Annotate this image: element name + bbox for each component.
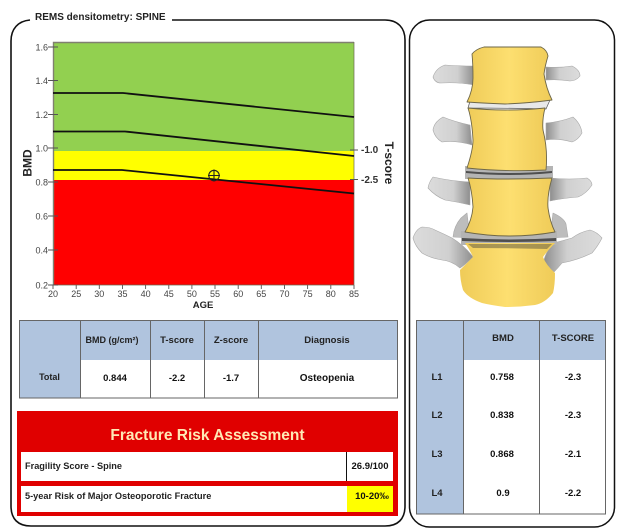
table: vertebra results: 0.868 bbox=[490, 449, 514, 460]
y axis labels: 1.2 bbox=[35, 110, 48, 120]
table: vertebra results: T-SCORE bbox=[552, 333, 594, 344]
panel: vertebrae and table bbox=[410, 20, 614, 527]
table: vertebra results: L3 bbox=[431, 449, 443, 460]
x axis labels: 45 bbox=[164, 289, 174, 299]
table: total results: Total bbox=[39, 372, 60, 382]
y axis labels: 0.2 bbox=[35, 280, 48, 290]
x axis labels: 40 bbox=[141, 289, 151, 299]
x axis labels: 25 bbox=[71, 289, 81, 299]
row: fragility score: 26.9/100 bbox=[352, 461, 388, 472]
transverse processes bbox=[413, 65, 602, 273]
x axis labels: 35 bbox=[117, 289, 128, 299]
y axis labels: 0.4 bbox=[35, 246, 48, 256]
table: vertebra results: -2.3 bbox=[565, 372, 581, 383]
patient marker bbox=[208, 170, 220, 182]
x axis labels: 65 bbox=[256, 289, 266, 299]
table: vertebra results: L2 bbox=[431, 410, 443, 421]
x axis labels: 70 bbox=[279, 289, 290, 299]
chart: BMD by age bbox=[20, 42, 396, 311]
table: vertebra results: L1 bbox=[431, 372, 443, 383]
table: vertebra results: 0.838 bbox=[490, 410, 514, 421]
x axis labels: 85 bbox=[349, 289, 359, 299]
table: vertebra results: -2.1 bbox=[565, 449, 582, 460]
panel: spine densitometry bbox=[11, 12, 405, 526]
axis title: AGE: AGE bbox=[193, 300, 213, 311]
x axis labels: 60 bbox=[233, 289, 243, 299]
table: total results: Z-score bbox=[214, 335, 248, 346]
table: vertebra results: 0.9 bbox=[496, 488, 510, 499]
table: vertebra results: L4 bbox=[431, 488, 443, 499]
y axis labels bbox=[35, 42, 48, 290]
row: 5-year risk: 5-year Risk of Major Osteoporotic Fracture bbox=[25, 491, 211, 501]
heading: REMS densitometry: REMS densitometry: SPINE bbox=[35, 12, 166, 23]
y axis labels: 1.0 bbox=[35, 144, 48, 154]
x axis labels: 55 bbox=[210, 289, 220, 299]
row: fragility score: Fragility Score - Spine bbox=[25, 461, 122, 471]
spine illustration bbox=[413, 47, 602, 307]
table: vertebra results: -2.2 bbox=[565, 488, 581, 499]
table: vertebra results: 0.758 bbox=[490, 372, 514, 383]
table: total results: BMD (g/cm²) bbox=[86, 335, 138, 345]
table: total results bbox=[19, 320, 398, 398]
table: total results: Osteopenia bbox=[300, 373, 355, 384]
table: total results: -2.2 bbox=[169, 373, 185, 384]
table: total results: 0.844 bbox=[103, 373, 128, 384]
L4 top shadow bbox=[468, 244, 552, 249]
table: vertebra results: BMD bbox=[492, 333, 514, 344]
panel: fracture risk assessment bbox=[17, 411, 398, 516]
T-score scale: -2.5 bbox=[361, 175, 379, 186]
table: vertebra results bbox=[416, 320, 606, 514]
x axis labels: 75 bbox=[303, 289, 313, 299]
x axis labels: 50 bbox=[187, 289, 197, 299]
row: 5-year risk: 10-20‰ bbox=[355, 491, 389, 502]
table: total results: T-score bbox=[160, 335, 194, 346]
y axis labels: 1.4 bbox=[35, 76, 48, 86]
T-score scale bbox=[361, 142, 396, 186]
axis title: BMD: BMD bbox=[20, 149, 34, 177]
y axis labels: 0.8 bbox=[35, 178, 48, 188]
table: total results: -1.7 bbox=[223, 373, 239, 384]
heading: fracture risk: Fracture Risk Assessment bbox=[110, 427, 305, 444]
row: fragility score bbox=[21, 452, 393, 481]
T-score scale: T-score bbox=[382, 142, 396, 185]
row: 5-year risk bbox=[21, 486, 393, 512]
T-score scale: -1.0 bbox=[361, 145, 379, 156]
reference curves bbox=[53, 93, 354, 194]
x axis labels: 80 bbox=[326, 289, 336, 299]
x axis labels: 20 bbox=[48, 289, 58, 299]
y axis labels: 1.6 bbox=[35, 42, 48, 52]
x axis labels bbox=[48, 289, 359, 299]
x axis labels: 30 bbox=[94, 289, 104, 299]
table: total results: Diagnosis bbox=[304, 335, 350, 346]
vertebral bodies bbox=[460, 47, 555, 307]
discs bbox=[461, 100, 557, 245]
table: vertebra results: -2.3 bbox=[565, 410, 581, 421]
y axis labels: 0.6 bbox=[35, 212, 48, 222]
